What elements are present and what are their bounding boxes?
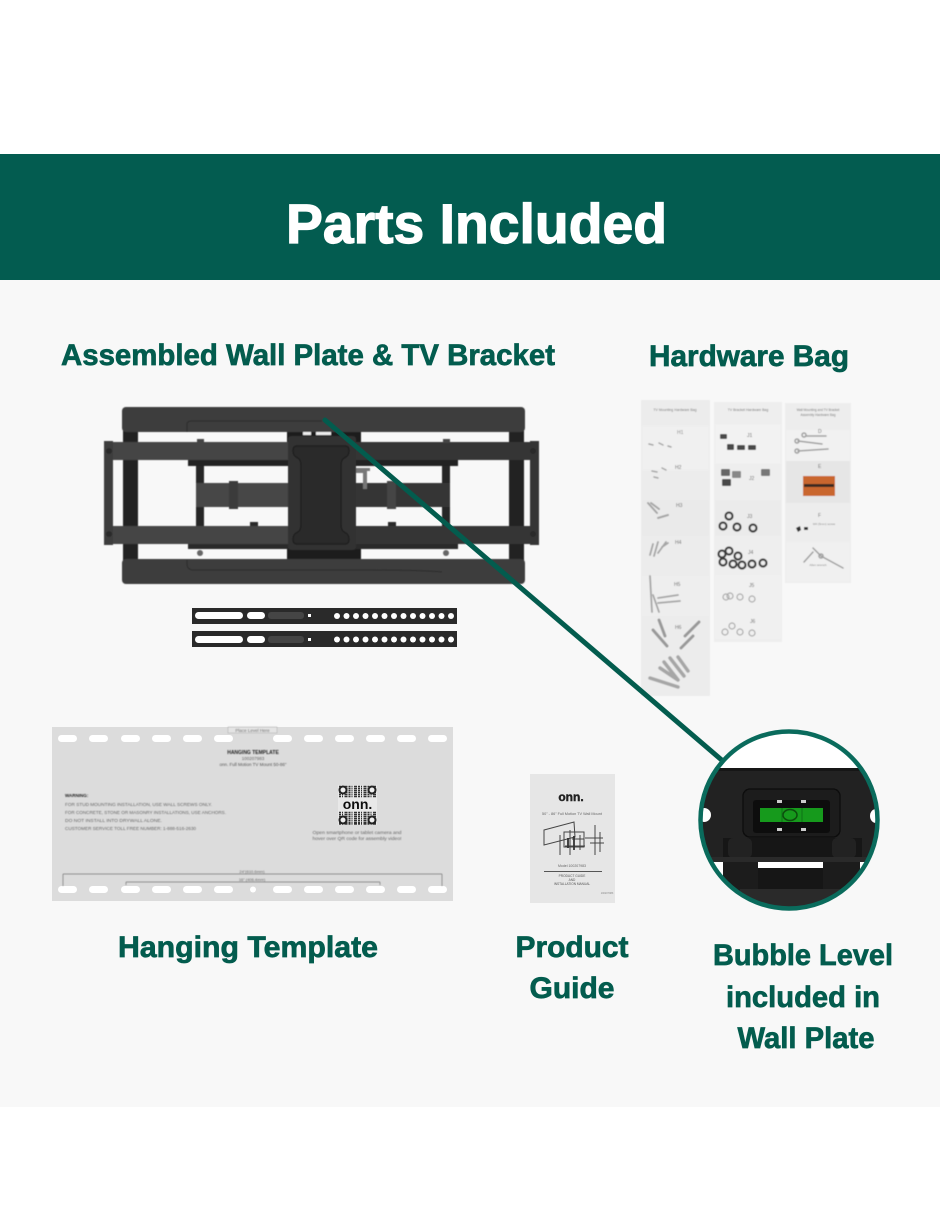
bag column: wall mounting hardware <box>785 403 851 583</box>
product guide booklet: 100207983 <box>601 892 614 895</box>
template labels <box>63 727 442 886</box>
product guide booklet: AND <box>569 878 576 882</box>
booklet line drawing <box>544 822 604 855</box>
bag column: TV mounting hardware: H3 <box>676 503 683 509</box>
bag column: wall mounting hardware: M4 (5mm) screw <box>813 522 836 526</box>
header banner <box>0 154 940 280</box>
bag column: TV mounting hardware <box>641 400 710 696</box>
cross bars <box>188 460 458 466</box>
bag column: wall mounting hardware: E <box>818 464 822 470</box>
heading: product guide second line: Guide <box>530 972 614 1005</box>
bag column: TV mounting hardware: H6 <box>675 625 682 631</box>
bag column: TV bracket hardware: J4 <box>748 550 754 556</box>
heading: bubble level: included in <box>726 981 880 1014</box>
bag column: TV bracket hardware: J5 <box>749 583 754 589</box>
green vial <box>760 808 823 822</box>
template labels: HANGING TEMPLATE <box>227 750 279 756</box>
template labels: onn. Full Motion TV Mount 50-86" <box>219 762 287 767</box>
template labels: FOR CONCRETE, STONE OR MASONRY INSTALLATIONS, USE ANCHORS. <box>65 810 226 816</box>
level housing <box>743 789 840 837</box>
product guide booklet: INSTALLATION MANUAL <box>554 882 590 886</box>
template labels: CUSTOMER SERVICE TOLL FREE NUMBER: 1-888-516-2630 <box>65 826 196 832</box>
template labels: 100207983 <box>242 756 265 761</box>
template labels: Place Level Here <box>235 728 270 733</box>
bottom bar <box>122 559 525 584</box>
lower bar <box>712 857 866 862</box>
rails <box>104 442 288 460</box>
inner uprights <box>196 464 204 528</box>
wall plate and TV bracket assembly <box>104 407 539 584</box>
template labels: 24"(610.6mm) <box>239 869 265 874</box>
bag column: wall mounting hardware: Allen wrench <box>809 563 827 567</box>
top bar <box>122 407 525 432</box>
bag column: TV bracket hardware: J2 <box>749 476 754 482</box>
template labels: DO NOT INSTALL INTO DRYWALL ALONE. <box>65 818 162 824</box>
bag column: wall mounting hardware: D <box>818 429 822 435</box>
template labels: hover over QR code for assembly video! <box>312 836 402 842</box>
black wall plate <box>702 771 876 857</box>
product guide booklet: 50" - 86" Full Motion TV Wall Mount <box>542 812 603 816</box>
bracket lower <box>192 631 457 647</box>
template labels: WARNING: <box>65 793 89 798</box>
knobs <box>723 838 862 858</box>
hardware bag contents <box>641 400 851 696</box>
QR code <box>338 785 377 825</box>
QR code: onn. <box>343 796 372 812</box>
bag column: wall mounting hardware: Assembly Hardware Bag <box>800 413 836 417</box>
arms <box>196 483 291 507</box>
bag column: TV mounting hardware: H5 <box>674 582 681 588</box>
orange anchor pack <box>803 476 835 496</box>
bag column: TV bracket hardware <box>714 402 782 642</box>
hanging template <box>52 727 453 901</box>
bag column: TV mounting hardware: H1 <box>677 430 684 436</box>
bag column: TV bracket hardware: J1 <box>747 433 752 439</box>
template slots <box>58 735 447 893</box>
bag column: wall mounting hardware: Wall Mounting and TV Bracket <box>797 408 840 412</box>
bag column: TV bracket hardware: J6 <box>750 619 756 625</box>
bag column: TV mounting hardware: H2 <box>675 465 682 471</box>
product guide booklet: Model 100207983 <box>558 864 586 868</box>
callout leader line <box>325 420 724 762</box>
bolts <box>197 550 203 556</box>
heading: bubble level: Bubble Level <box>713 939 893 972</box>
title: Parts Included <box>286 192 667 255</box>
bag column: TV bracket hardware: TV Bracket Hardware Bag <box>728 408 768 412</box>
template labels: 16" (406.4mm) <box>239 877 266 882</box>
bag column: wall mounting hardware: F <box>818 513 821 519</box>
heading: bubble level <box>713 939 893 1055</box>
product guide booklet: PRODUCT GUIDE <box>559 874 585 878</box>
heading: hanging template: Hanging Template <box>118 931 378 964</box>
white gaps <box>690 862 890 912</box>
lower frame <box>758 868 823 889</box>
posts <box>123 430 138 561</box>
template labels: FOR STUD MOUNTING INSTALLATION, USE WALL SCREWS ONLY. <box>65 802 212 808</box>
side holes <box>702 808 711 822</box>
lower posts <box>723 862 758 891</box>
centre carriage <box>287 431 361 443</box>
product guide booklet: onn. <box>558 790 584 804</box>
heading: assembled wall plate: Assembled Wall Plate & TV Bracket <box>61 339 555 372</box>
bag column: TV mounting hardware: H4 <box>675 540 682 546</box>
centre plate <box>288 436 356 550</box>
heading: hardware bag: Hardware Bag <box>649 340 849 373</box>
heading: bubble level: Wall Plate <box>738 1022 874 1055</box>
heading: product guide: Product <box>516 931 629 964</box>
page background panel <box>0 280 940 1107</box>
bubble level magnified callout <box>690 730 890 912</box>
product guide booklet <box>530 774 615 903</box>
bag column: TV bracket hardware: J3 <box>747 514 752 520</box>
bag column: TV mounting hardware: TV Mounting Hardware Bag <box>653 408 697 412</box>
template labels: Open smartphone or tablet camera and <box>312 830 402 836</box>
TV brackets <box>192 608 457 647</box>
bracket upper <box>192 608 457 624</box>
